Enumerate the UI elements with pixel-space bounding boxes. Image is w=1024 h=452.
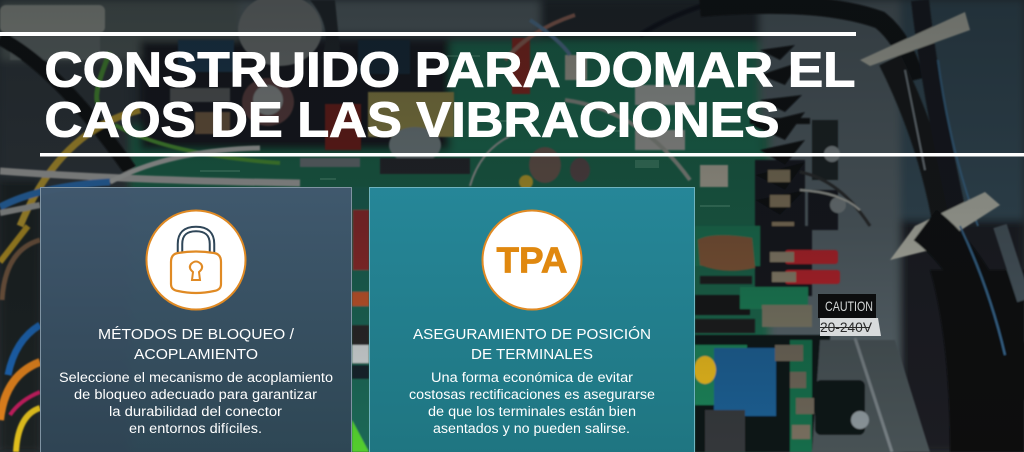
icon: TPA badge xyxy=(482,210,582,310)
icon: padlock xyxy=(146,210,246,310)
caution label: 20-240V xyxy=(820,319,873,335)
icon: TPA badge: TPA xyxy=(496,240,568,280)
heading: ACOPLAMIENTO xyxy=(134,347,258,363)
body text: costosas rectificaciones es asegurarse xyxy=(409,387,655,402)
body text xyxy=(59,370,333,436)
heading xyxy=(413,326,651,363)
body text: Seleccione el mecanismo de acoplamiento xyxy=(59,370,333,385)
heading: ASEGURAMIENTO DE POSICIÓN xyxy=(413,326,651,343)
cables xyxy=(0,38,130,170)
fine pale board detail xyxy=(200,55,730,207)
panel: métodos de bloqueo xyxy=(40,188,352,452)
body text xyxy=(409,370,655,436)
top rule xyxy=(0,32,856,36)
terminal block xyxy=(755,160,805,290)
heading xyxy=(98,326,295,363)
caution label: CAUTION xyxy=(825,298,873,314)
bottom rule xyxy=(40,153,1024,156)
heading: DE TERMINALES xyxy=(471,347,593,363)
metal plate and shadow xyxy=(812,340,930,452)
title xyxy=(44,44,856,148)
body text: de bloqueo adecuado para garantizar xyxy=(74,387,318,402)
capacitors and parts behind the title xyxy=(238,0,322,66)
body text: asentados y no pueden salirse. xyxy=(433,421,630,436)
panel: aseguramiento de posición xyxy=(370,188,694,452)
body text: la durabilidad del conector xyxy=(109,404,283,419)
heading: MÉTODOS DE BLOQUEO / xyxy=(98,326,295,343)
caution label xyxy=(818,294,881,336)
lower right parts xyxy=(695,226,760,266)
body text: Una forma económica de evitar xyxy=(431,370,634,385)
strip between panels xyxy=(352,187,369,452)
body text: en entornos difíciles. xyxy=(129,421,262,436)
left bottom wires xyxy=(2,240,40,300)
title: CAOS DE LAS VIBRACIONES xyxy=(44,94,780,148)
body text: de que los terminales están bien xyxy=(428,404,636,419)
title: CONSTRUIDO PARA DOMAR EL xyxy=(44,44,856,98)
